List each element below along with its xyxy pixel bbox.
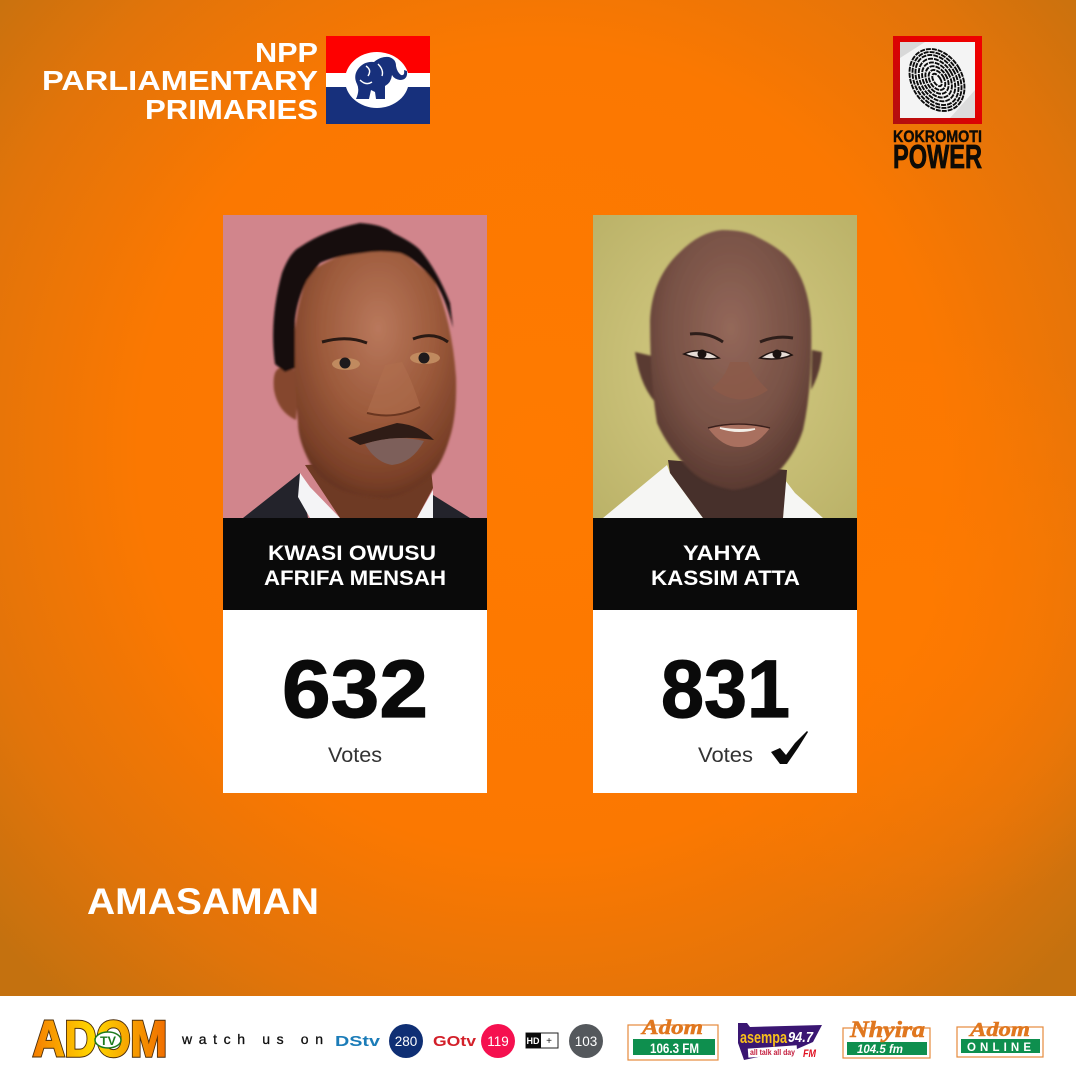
logo: Asempa 94.7 FM <box>738 1023 822 1060</box>
portrait: Kwasi Owusu Afrifa Mensah <box>223 215 487 518</box>
title: NPP Parliamentary Primaries: PARLIAMENTARY <box>42 65 318 96</box>
eyes and brows <box>322 336 448 370</box>
channel: GOtv 119: GOtv <box>433 1033 477 1050</box>
name banner: AFRIFA MENSAH <box>264 567 446 590</box>
footer bar <box>0 996 1076 1080</box>
channel: HD+ 103: 103 <box>575 1034 597 1049</box>
channel: GOtv 119 <box>433 1024 515 1058</box>
channel: DStv 280 <box>335 1024 423 1058</box>
logo: Nhyira 104.5 FM: 104.5 fm <box>857 1042 903 1056</box>
logo: Kokromoti Power: POWER <box>893 138 982 175</box>
nose and mouth <box>708 362 770 447</box>
logo: Nhyira 104.5 FM: Nhyira <box>849 1017 925 1042</box>
icon: NPP flag with elephant <box>326 36 430 124</box>
panel: candidate Yahya Kassim Atta <box>593 215 857 793</box>
panel: candidate Kwasi Owusu Afrifa Mensah <box>223 215 487 793</box>
logo: Adom TV: ADOM <box>33 1011 167 1067</box>
name banner <box>223 518 487 610</box>
logo: Kokromoti Power <box>893 36 982 175</box>
logo: Asempa 94.7 FM: 94.7 <box>788 1029 814 1046</box>
channel: HD+ 103 <box>526 1024 603 1058</box>
logo: Asempa 94.7 FM: asempa <box>740 1028 787 1047</box>
logo: Adom Online <box>957 1019 1043 1057</box>
channel: DStv 280: 280 <box>395 1034 417 1049</box>
logo: Adom TV: TV <box>100 1034 116 1048</box>
logo: Nhyira 104.5 FM <box>843 1017 930 1058</box>
icon: elephant <box>355 57 407 99</box>
vote count: Votes <box>328 744 382 767</box>
eyes and brows <box>684 334 793 359</box>
nose and mouth <box>348 382 434 465</box>
channel: HD+ 103: + <box>546 1036 552 1047</box>
logo: Adom Online: ONLINE <box>967 1042 1031 1054</box>
logo: Asempa 94.7 FM: FM <box>803 1048 817 1060</box>
name banner: KASSIM ATTA <box>651 567 800 590</box>
channel: HD+ 103: HD <box>526 1036 540 1046</box>
vote count: Votes <box>698 744 753 767</box>
constituency label: AMASAMAN <box>87 881 319 922</box>
vote count <box>223 610 487 793</box>
name banner: YAHYA <box>683 542 761 565</box>
logo: Adom 106.3 FM <box>628 1015 718 1060</box>
vote count: 831 <box>661 644 790 735</box>
name banner <box>593 518 857 610</box>
logo: Adom Online: Adom <box>968 1019 1030 1041</box>
logo: Asempa 94.7 FM: all talk all day <box>750 1048 795 1057</box>
logo: Adom 106.3 FM: 106.3 FM <box>650 1040 699 1056</box>
title: NPP Parliamentary Primaries: NPP <box>255 37 318 68</box>
name banner: KWASI OWUSU <box>268 542 436 565</box>
icon: winner check mark <box>771 731 808 764</box>
channel: GOtv 119: 119 <box>487 1034 509 1049</box>
logo: Kokromoti Power: KOKROMOTI <box>893 127 982 146</box>
title: NPP Parliamentary Primaries <box>42 37 318 125</box>
title: NPP Parliamentary Primaries: PRIMARIES <box>145 94 318 125</box>
logo: Adom 106.3 FM: Adom <box>640 1015 703 1039</box>
channel: DStv 280: DStv <box>335 1033 381 1050</box>
icon: fingerprint <box>898 39 976 121</box>
portrait: Yahya Kassim Atta <box>593 215 857 518</box>
logo: Adom TV: ADOM <box>33 1011 167 1067</box>
vote count <box>593 610 857 793</box>
watch us on: watch us on <box>181 1031 323 1047</box>
vote count: 632 <box>282 644 428 735</box>
